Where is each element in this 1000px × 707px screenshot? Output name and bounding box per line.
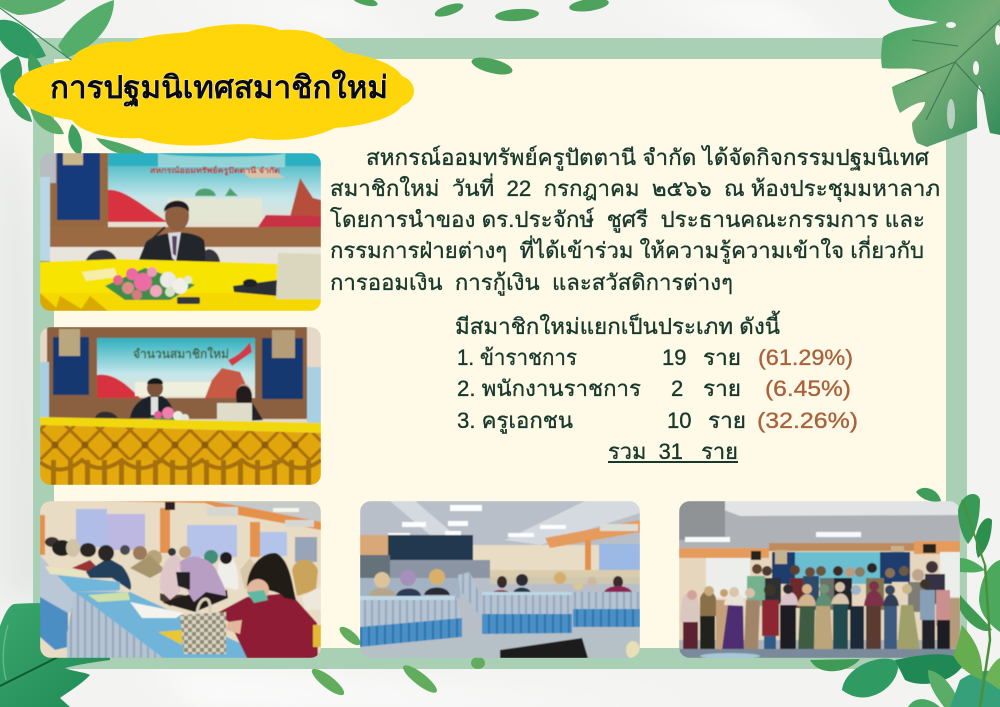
woman in maroon <box>217 593 318 658</box>
leaves: top left cluster <box>0 0 150 156</box>
decorative leaves: top edge <box>351 0 610 63</box>
row 2: 2 <box>671 376 683 401</box>
row 1: ราย <box>703 345 741 370</box>
back row <box>747 561 945 612</box>
check bag <box>180 612 226 654</box>
row 2: ราย <box>703 376 741 401</box>
row 1: 19 <box>662 345 686 370</box>
article paragraph: กรรมการฝ่ายต่างๆ ที่ได้เข้าร่วม ให้ความรู้ความเข้าใจ เกี่ยวกับ <box>330 235 924 264</box>
article paragraph <box>330 145 940 296</box>
row 3 <box>457 408 858 434</box>
photo 5: group photo <box>679 501 960 659</box>
row 1 <box>457 345 853 370</box>
leaf: bottom left monstera <box>0 603 110 707</box>
navy sitter <box>86 558 131 590</box>
row 1: 1. ข้าราชการ <box>457 345 577 370</box>
leaves: bottom right vine <box>810 488 1000 707</box>
article paragraph: สหกรณ์ออมทรัพย์ครูปัตตานี จำกัด ได้จัดกิจกรรมปฐมนิเทศ <box>366 145 929 171</box>
photo 2: two presenters at golden draped table: จำนวนสมาชิกใหม่ <box>133 346 229 361</box>
row 2: 2. พนักงานราชการ <box>457 376 641 401</box>
decorative leaf: inside top <box>470 54 514 78</box>
photo 1: speaker at yellow table <box>40 153 321 311</box>
row 3: 10 <box>667 408 691 433</box>
leaf: top right monstera <box>881 0 1000 147</box>
article paragraph: โดยการนำของ ดร.ประจักษ์ ชูศรี ประธานคณะกรรมการ และ <box>330 207 925 233</box>
membership list: มีสมาชิกใหม่แยกเป็นประเภท ดังนี้ <box>455 311 780 339</box>
photo 4: wide hall of tables <box>360 501 640 659</box>
row 3: 3. ครูเอกชน <box>457 408 573 434</box>
row 3: ราย <box>708 408 746 433</box>
row 2 <box>457 376 851 401</box>
membership list <box>455 311 858 464</box>
table 2 <box>67 592 163 658</box>
total: รวม 31 ราย <box>608 439 738 464</box>
row 1: (61.29%) <box>758 345 853 370</box>
yellow scarf woman <box>292 560 318 596</box>
article paragraph: การออมเงิน การกู้เงิน และสวัสดิการต่างๆ <box>330 270 733 296</box>
hijab women <box>160 593 190 606</box>
decorative leaves: bottom edge <box>309 624 485 699</box>
front row <box>680 581 920 654</box>
article paragraph: สมาชิกใหม่ วันที่ 22 กรกฎาคม ๒๕๖๖ ณ ห้องประชุมมหาลาภ <box>330 173 940 202</box>
yellow title cloud <box>14 24 414 146</box>
table 1 <box>40 555 120 613</box>
photo 2: two presenters at golden draped table <box>40 327 321 485</box>
photo 1: speaker at yellow table: สหกรณ์ออมทรัพย์ครูปัตตานี จำกัด <box>150 165 280 176</box>
photo 3: members writing at blue tables <box>40 501 321 658</box>
row 2: (6.45%) <box>765 376 851 401</box>
title: การปฐมนิเทศสมาชิกใหม่ <box>50 69 388 108</box>
far crowd <box>45 537 262 590</box>
row 3: (32.26%) <box>757 408 858 433</box>
